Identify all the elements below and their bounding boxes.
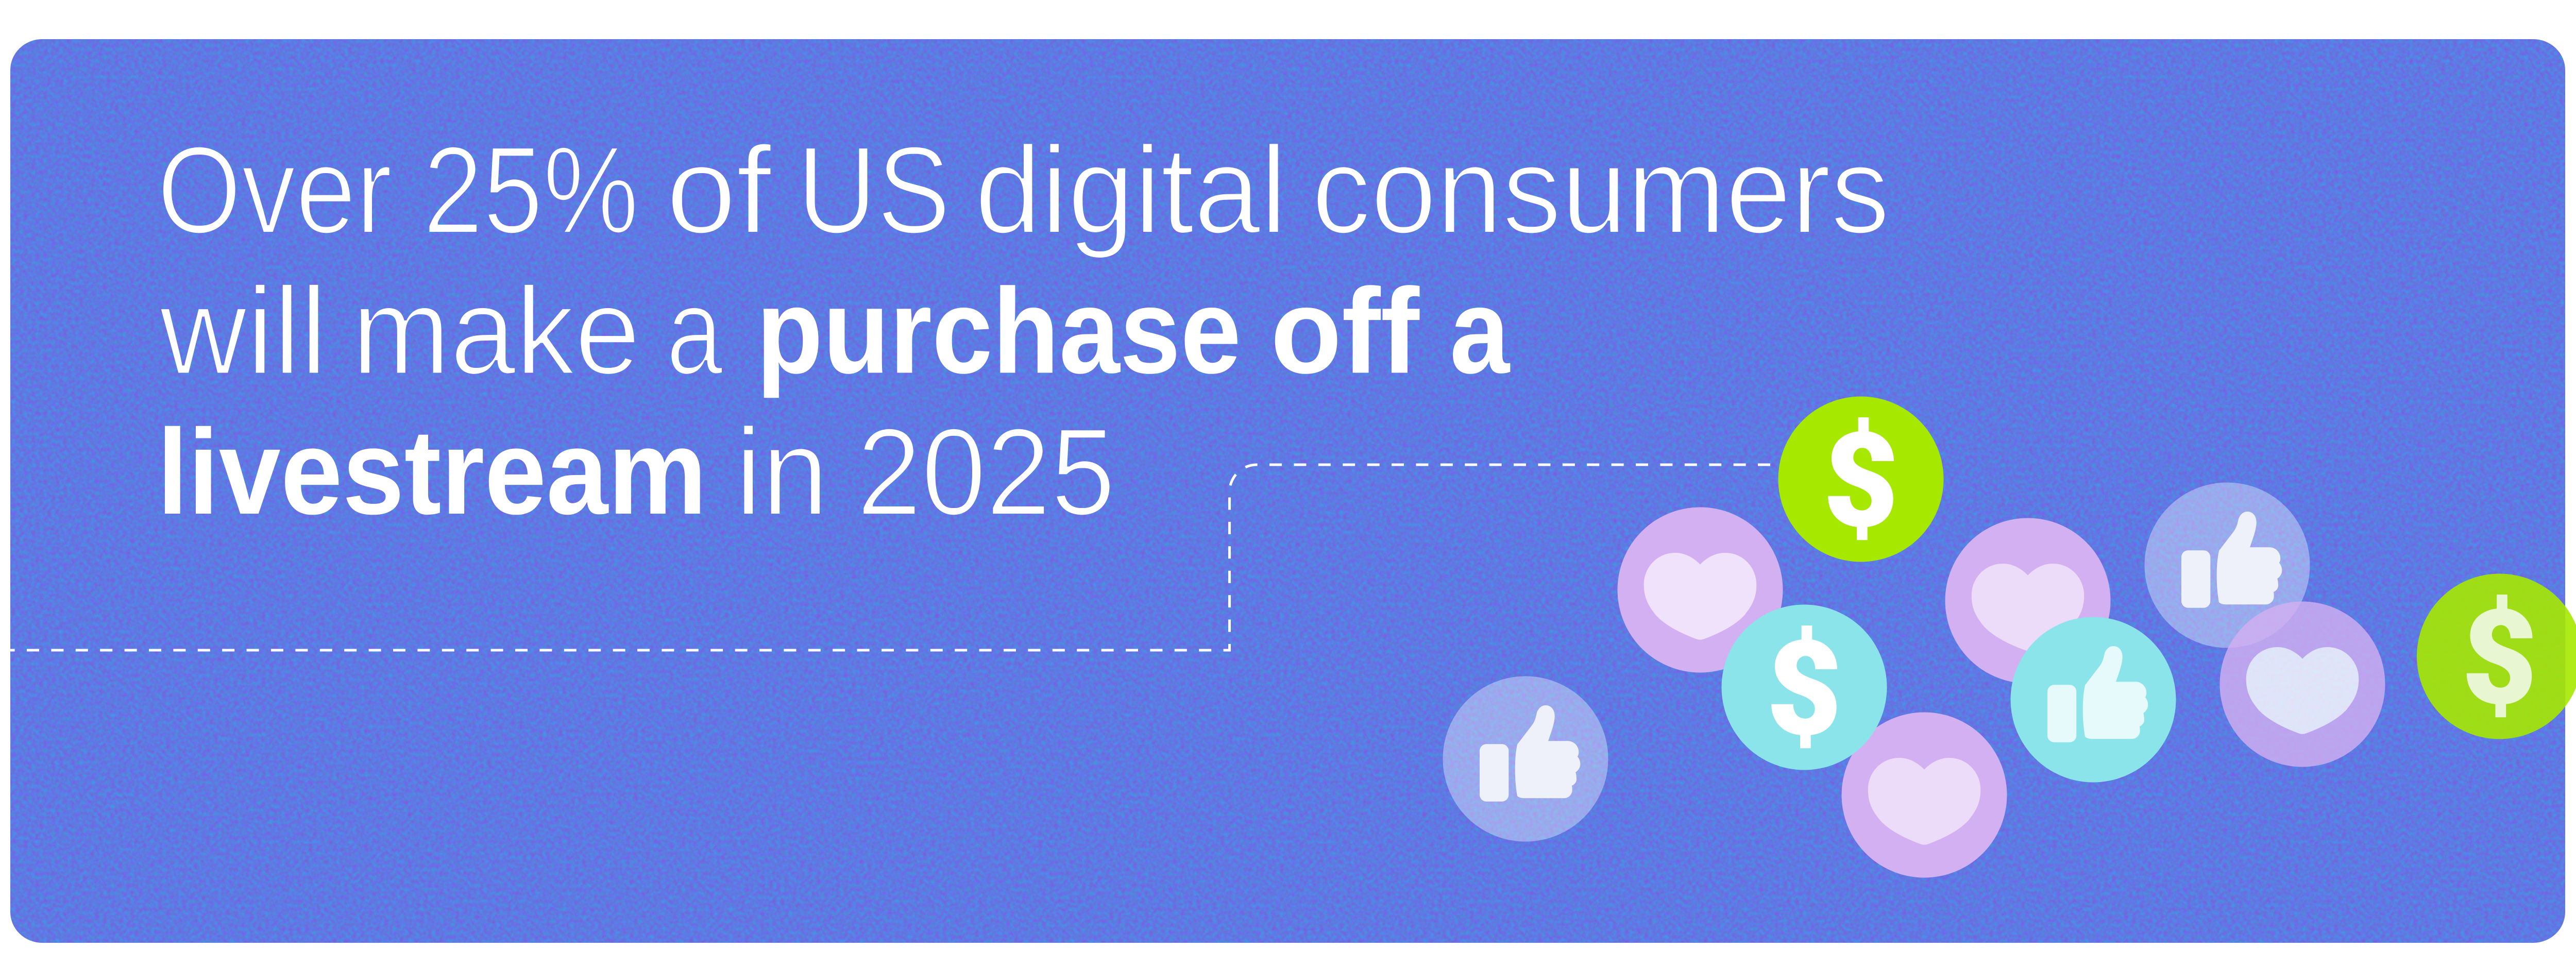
headline: bold text runs: a <box>1450 263 1511 399</box>
headline: bold text runs: off <box>1270 263 1420 399</box>
icon: cyan thumbs up <box>2010 617 2176 782</box>
headline: light text runs: of <box>666 121 772 260</box>
icon: faded thumbs up, left <box>1443 676 1608 842</box>
headline: light text runs: Over <box>157 121 392 260</box>
headline: bold text runs: purchase <box>756 263 1241 399</box>
headline: light text runs: US <box>797 121 951 260</box>
icon: faded green dollar coin, right edge <box>2417 574 2576 739</box>
headline: bold text runs: livestream <box>157 404 707 539</box>
dashed connector line <box>3 465 1783 650</box>
headline: light text runs <box>157 121 1890 541</box>
headline <box>157 121 1890 541</box>
icon: green dollar coin <box>1778 397 1943 562</box>
headline: light text runs: 25% <box>423 121 639 260</box>
headline: bold text runs <box>157 263 1511 539</box>
headline: light text runs: 2025 <box>857 403 1115 541</box>
icon: cyan dollar coin <box>1722 605 1887 770</box>
headline: light text runs: a <box>666 262 723 401</box>
headline: light text runs: consumers <box>1312 121 1890 260</box>
headline: light text runs: make <box>352 262 640 401</box>
icon: purple heart, centre <box>1945 518 2110 683</box>
icon: faded thumbs up, upper right <box>2144 482 2310 648</box>
headline: light text runs: digital <box>975 121 1287 260</box>
headline: light text runs: in <box>735 403 828 541</box>
icon: faded purple heart <box>2219 602 2385 767</box>
icon: purple heart, bottom <box>1841 712 2007 878</box>
headline: light text runs: will <box>159 262 327 401</box>
icon: purple heart, upper left <box>1618 507 1783 673</box>
